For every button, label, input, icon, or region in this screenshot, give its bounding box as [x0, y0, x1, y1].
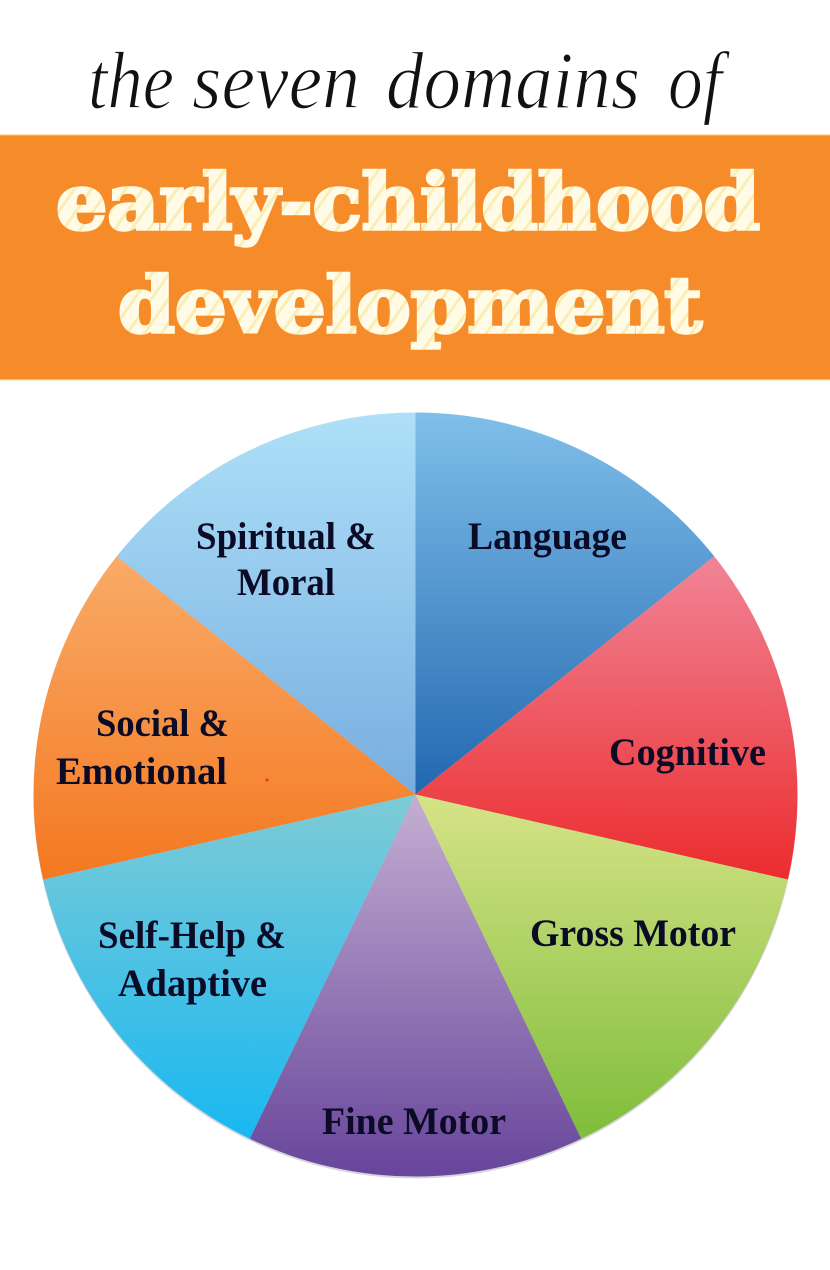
slice: Fine Motor: [250, 794, 581, 1177]
slice: Self-Help & Adaptive: Adaptive: [118, 962, 267, 1005]
slice: Self-Help & Adaptive: Self-Help &: [98, 914, 286, 957]
banner: [0, 134, 830, 380]
slice: Gross Motor: [416, 794, 788, 1139]
title: the seven domains of: domains: [386, 35, 640, 126]
slice: Cognitive: Cognitive: [609, 731, 766, 774]
slice: Language: Language: [468, 515, 627, 558]
slice: Self-Help & Adaptive: [43, 794, 415, 1139]
heading: development: development: [118, 261, 702, 351]
slice: Language: [416, 412, 714, 794]
title: the seven domains of: of: [668, 35, 731, 126]
slice: Spiritual & Moral: Moral: [237, 561, 335, 604]
slice: Social & Emotional: [34, 556, 416, 880]
slice: Fine Motor: Fine Motor: [322, 1100, 506, 1143]
slice: Social & Emotional: Social &: [96, 702, 229, 745]
slice: Social & Emotional: Emotional: [56, 750, 227, 793]
slice: Cognitive: [416, 556, 797, 880]
title: the seven domains of: [88, 35, 731, 126]
heading: early-childhood: early-childhood: [56, 158, 760, 248]
title: the seven domains of: seven: [192, 35, 360, 126]
title: the seven domains of: the: [88, 35, 174, 126]
slice: Gross Motor: Gross Motor: [530, 912, 736, 955]
slice: Spiritual & Moral: Spiritual &: [196, 515, 376, 558]
pie chart: [34, 412, 798, 1178]
slice: Spiritual & Moral: [117, 412, 416, 794]
